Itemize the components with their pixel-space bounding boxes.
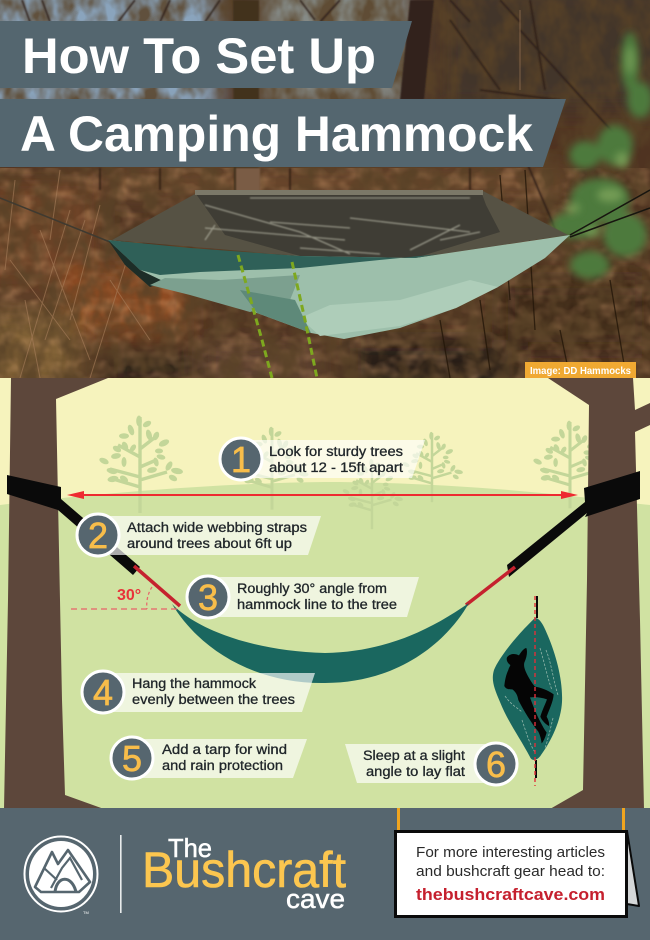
left red hammock line bbox=[134, 566, 180, 606]
step 3 bbox=[187, 576, 419, 618]
step 4: evenly between the trees bbox=[132, 692, 295, 707]
brand wordmark: The bbox=[168, 833, 212, 863]
step 2: around trees about 6ft up bbox=[127, 536, 292, 551]
step 6 bbox=[345, 743, 517, 785]
step 6: Sleep at a slight bbox=[363, 748, 465, 763]
step 1 bbox=[220, 438, 425, 480]
top-down hammock with sleeper bbox=[493, 596, 562, 786]
icon: Bushcraft Cave logo bbox=[24, 836, 98, 915]
panel: illustrated scene background bbox=[0, 378, 650, 809]
hammock in photo bbox=[0, 190, 650, 378]
distance arrow bbox=[67, 491, 578, 499]
icon: Bushcraft Cave logo: TM bbox=[83, 910, 89, 915]
30 degree angle annotation: 30° bbox=[117, 587, 141, 604]
step 3: 3 bbox=[198, 577, 218, 618]
step 5: and rain protection bbox=[162, 758, 283, 773]
right tree trunk bbox=[548, 378, 650, 809]
step 2 bbox=[77, 514, 321, 556]
step 1: 1 bbox=[231, 439, 251, 480]
panel: footer bbox=[0, 808, 650, 940]
left webbing strap bbox=[7, 475, 140, 575]
hanging sign bbox=[396, 808, 639, 916]
panel: hero photo of hammock in forest bbox=[0, 0, 650, 390]
step 5: Add a tarp for wind bbox=[162, 742, 287, 757]
right webbing strap bbox=[507, 471, 640, 577]
logo divider bbox=[120, 835, 122, 913]
step 5 bbox=[111, 737, 307, 779]
step 4: 4 bbox=[93, 672, 113, 713]
brand wordmark: cave bbox=[286, 884, 345, 914]
30 degree angle annotation bbox=[71, 587, 178, 609]
left tree trunk bbox=[4, 378, 108, 809]
hanging sign: and bushcraft gear head to: bbox=[416, 863, 605, 880]
step 6: 6 bbox=[486, 744, 506, 785]
brand wordmark: Bushcraft bbox=[142, 842, 346, 898]
step 1: about 12 - 15ft apart bbox=[269, 460, 403, 475]
step 2: 2 bbox=[88, 515, 108, 556]
right red hammock line bbox=[466, 567, 515, 605]
step 5: 5 bbox=[122, 738, 142, 779]
brand wordmark bbox=[142, 833, 346, 914]
hanging sign: For more interesting articles bbox=[416, 844, 605, 861]
image credit tag bbox=[525, 362, 636, 378]
step 2: Attach wide webbing straps bbox=[127, 520, 307, 535]
hammock side view bbox=[172, 603, 469, 683]
title banner: line 1: How To Set Up bbox=[22, 28, 376, 84]
background trees bbox=[98, 416, 609, 529]
green pine tree bbox=[551, 32, 650, 279]
step 6: angle to lay flat bbox=[366, 764, 465, 779]
step 4: Hang the hammock bbox=[132, 676, 256, 691]
trunks bbox=[233, 0, 259, 192]
icon: sleeper silhouette bbox=[504, 648, 554, 743]
step 3: hammock line to the tree bbox=[237, 597, 397, 612]
step 4 bbox=[82, 671, 315, 713]
title banner: line 2: A Camping Hammock bbox=[20, 106, 533, 162]
forest texture bbox=[0, 168, 650, 378]
step 3: Roughly 30° angle from bbox=[237, 581, 387, 596]
image credit tag: Image: DD Hammocks bbox=[530, 366, 631, 377]
step 1: Look for sturdy trees bbox=[269, 444, 403, 459]
hanging sign: thebushcraftcave.com bbox=[416, 885, 605, 904]
